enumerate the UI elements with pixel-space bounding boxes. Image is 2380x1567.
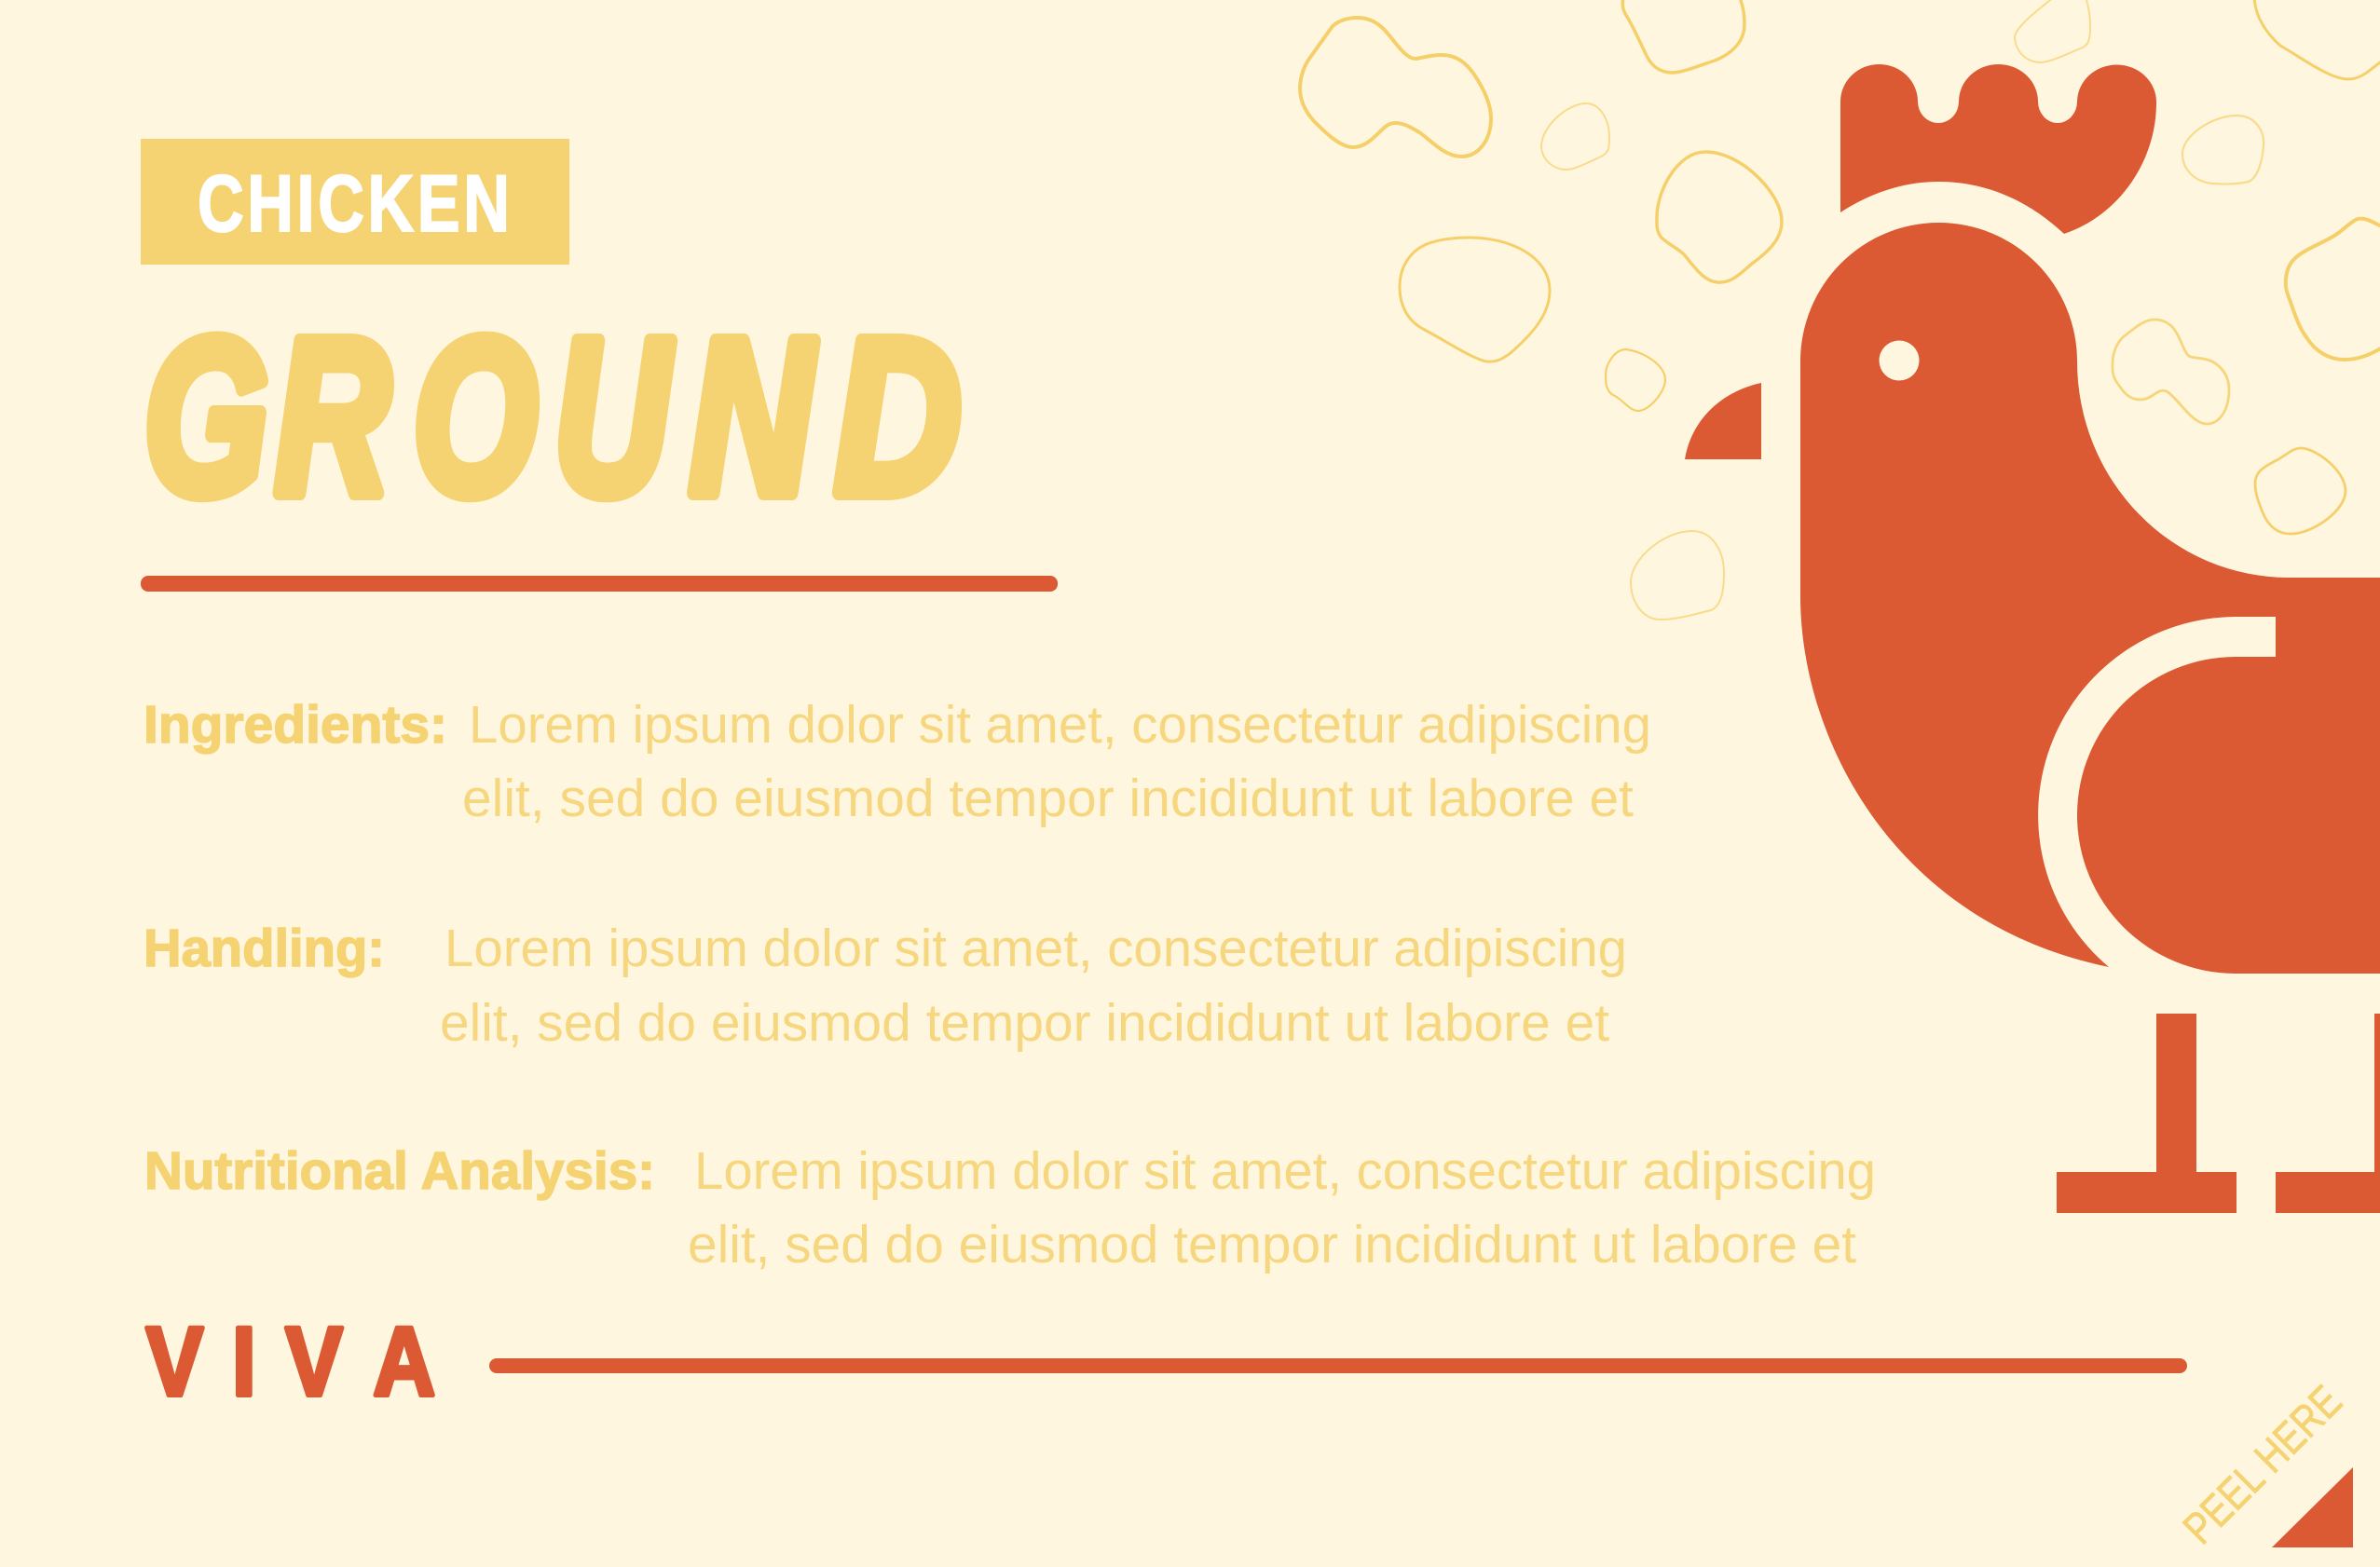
peel here label: PEEL HERE [2174, 1377, 2352, 1554]
text block: nutritional analysis: Lorem ipsum dolor sit amet, consectetur adipiscing [694, 1141, 1876, 1201]
text block: nutritional analysis: elit, sed do eiusmod tempor incididunt ut labore et [688, 1215, 1856, 1274]
title: ground: D [835, 294, 961, 540]
badge: chicken: CHICKEN [198, 159, 513, 249]
text block: ingredients: elit, sed do eiusmod tempor incididunt ut labore et [462, 769, 1634, 828]
rooster body [1800, 223, 2380, 974]
badge: chicken [141, 139, 569, 265]
rooster comb [1840, 64, 2156, 234]
text block: handling [144, 919, 1627, 1053]
rooster back leg [2276, 1014, 2380, 1213]
title: ground: N [690, 293, 815, 539]
text block: ingredients: Lorem ipsum dolor sit amet, consectetur adipiscing [469, 695, 1651, 755]
text block: nutritional analysis [144, 1141, 1876, 1274]
text block: handling: Lorem ipsum dolor sit amet, consectetur adipiscing [445, 919, 1627, 978]
text block: ingredients [144, 695, 1651, 828]
text block: handling: Handling: [144, 919, 385, 978]
text block: handling: elit, sed do eiusmod tempor incididunt ut labore et [440, 993, 1609, 1053]
icon: peel corner triangle [2272, 1467, 2353, 1547]
rooster eye [1879, 341, 1920, 380]
brand: viva: VIVA [146, 1306, 435, 1416]
title: ground [144, 293, 961, 540]
text block: nutritional analysis: Nutritional Analysis: [144, 1141, 655, 1201]
floating egg outlines [1300, 0, 2380, 620]
icon: rooster [1685, 64, 2380, 1213]
top divider [141, 576, 1058, 592]
bottom divider [489, 1358, 2187, 1373]
title: ground: GROU [144, 293, 673, 539]
rooster front leg [2057, 1014, 2236, 1213]
text block: ingredients: Ingredients: [144, 695, 447, 755]
rooster beak [1685, 383, 1761, 459]
